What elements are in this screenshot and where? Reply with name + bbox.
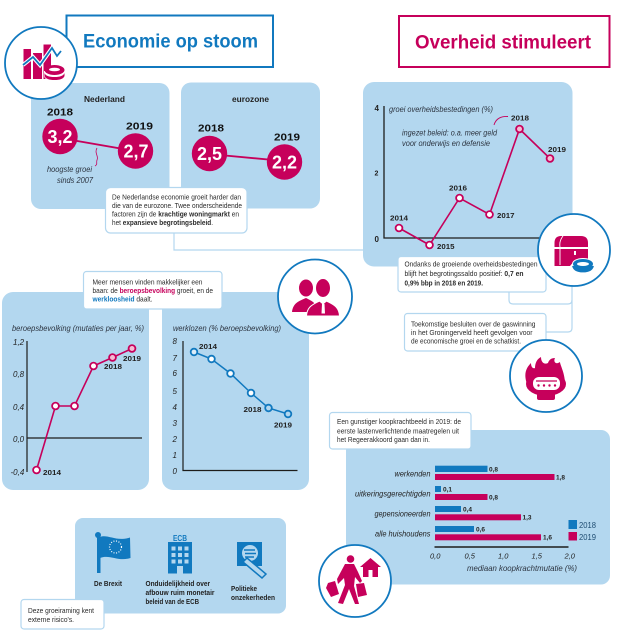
x axis labels: 0,0 [430, 552, 441, 560]
text box: begrotingssaldo [398, 256, 546, 292]
annotation: ingezet beleid: voor onderwijs en defensie [402, 139, 491, 148]
axis labels: 4 [172, 403, 178, 412]
value 2019 [267, 132, 302, 180]
category labels: alle huishoudens [375, 528, 431, 538]
year labels: 2019 [274, 420, 292, 430]
annotation: hoogste groei: sinds 2007 [57, 176, 94, 185]
text box: begrotingssaldo: Ondanks de groeiende overheidsbestedingen [404, 260, 538, 268]
value 2018 [42, 108, 78, 154]
chart title: beroepsbevolking (mutaties per jaar, %) [12, 323, 144, 333]
text box: Nederlandse economie: De Nederlandse economie groeit harder dan [112, 192, 241, 202]
title: Overheid stimuleert [399, 16, 610, 67]
panel: externe risico's [75, 518, 286, 614]
x axis labels [430, 552, 576, 560]
year labels: 2014 [43, 468, 62, 477]
axis labels: 2 [374, 170, 378, 178]
panel: groei overheidsbestedingen line chart [363, 82, 572, 266]
axis labels: 0 [374, 235, 380, 244]
text box: gaswinning: de economische groei en de schatkist. [411, 336, 521, 346]
text box: beroepsbevolking en werkloosheid: Meer mensen vinden makkelijker een [92, 278, 202, 286]
annotation: ingezet beleid: ingezet beleid: o.a. meer geld [402, 128, 497, 138]
year labels [43, 354, 141, 477]
panel: werklozen line chart [162, 292, 309, 490]
axes [183, 341, 298, 470]
text box: Nederlandse economie: die van de eurozone. Twee onderscheidende [112, 201, 242, 210]
value 2019: 2019 [274, 132, 301, 144]
text box: beroepsbevolking en werkloosheid [84, 272, 222, 309]
annotation: ingezet beleid [402, 116, 508, 148]
legend: 2019 [579, 532, 596, 542]
value 2019: 2019 [126, 122, 154, 132]
category labels: gepensioneerden [374, 508, 431, 518]
value 2018: 3,2 [48, 127, 72, 147]
text box: beroepsbevolking en werkloosheid: werkloosheid daalt. [92, 294, 152, 304]
axis labels: 0,8 [13, 370, 25, 379]
value labels: 0,1 [443, 486, 452, 494]
text box: Nederlandse economie [106, 188, 247, 233]
year labels [390, 114, 566, 251]
data line [194, 352, 288, 414]
text box: externe risico's: externe risico's. [28, 615, 74, 624]
risk: ECB: ECB [173, 534, 187, 543]
x axis labels: 2,0 [564, 552, 576, 560]
axis labels: 7 [172, 354, 178, 363]
text box: koopkrachtbeeld: het Regeerakkoord gaan dan in. [337, 435, 430, 444]
year labels: 2018 [104, 362, 122, 371]
risk: ECB: beleid van de ECB [146, 597, 199, 606]
title: Overheid stimuleert: Overheid stimuleert [415, 32, 591, 54]
risk: politieke onzekerheden: Politieke [231, 584, 257, 593]
text box: Nederlandse economie: het expansieve begrotingsbeleid. [112, 218, 213, 227]
icon: two people [278, 260, 352, 334]
text box: begrotingssaldo: blijft het begrotingssaldo positief: 0,7 en [404, 269, 524, 278]
axis labels: 3 [172, 419, 178, 428]
year labels: 2018 [511, 114, 529, 122]
axis labels: 0 [172, 467, 178, 476]
chart title: groei overheidsbestedingen (%) [389, 105, 493, 114]
x axis title: mediaan koopkrachtmutatie (%) [467, 563, 577, 573]
year labels: 2016 [449, 184, 467, 192]
year labels: 2015 [437, 242, 454, 251]
icon: gas flame [510, 340, 582, 412]
axis labels [172, 337, 178, 476]
data line [36, 348, 132, 470]
heading: Nederland: Nederland [84, 94, 125, 104]
value 2019 [118, 122, 154, 169]
category labels: werkenden [394, 468, 431, 478]
text box: koopkrachtbeeld [330, 412, 471, 449]
year labels: 2014 [199, 342, 218, 351]
text box: koopkrachtbeeld: Een gunstiger koopkrachtbeeld in 2019: de [337, 417, 461, 426]
year labels [199, 342, 292, 430]
title: Economie op stoom [66, 16, 273, 67]
axis labels: 8 [172, 337, 178, 346]
value 2019: 2,7 [124, 142, 148, 162]
icon: bars, trend line and coins [5, 27, 77, 99]
x axis labels: 1,0 [498, 552, 509, 560]
risk: De Brexit [94, 532, 130, 588]
value labels: 0,4 [463, 506, 472, 514]
axis labels: 0,0 [13, 435, 25, 444]
axis labels: 1,2 [13, 338, 25, 347]
axis labels [374, 104, 380, 244]
icon: shopper with house [319, 545, 391, 617]
axis labels: 6 [172, 369, 178, 378]
panel: beroepsbevolking line chart [2, 292, 149, 490]
connector lines [174, 233, 572, 332]
x axis labels: 1,5 [532, 552, 543, 560]
risk: De Brexit: De Brexit [94, 579, 122, 588]
risk: ECB [146, 534, 215, 606]
risk: ECB: Onduidelijkheid over [146, 579, 210, 588]
category labels: uitkeringsgerechtigden [355, 488, 431, 498]
panel: eurozone [181, 82, 320, 208]
chart title: werklozen (% beroepsbevolking) [173, 323, 281, 333]
text box: Nederlandse economie: factoren zijn de krachtige woningmarkt en [112, 210, 239, 218]
text box: beroepsbevolking en werkloosheid: baan: de beroepsbevolking groeit, en de [92, 286, 213, 295]
value labels: 1,3 [522, 514, 532, 522]
icon: treasure chest [538, 214, 610, 286]
data points [396, 126, 553, 248]
year labels: 2019 [548, 145, 566, 154]
year labels: 2017 [497, 211, 514, 220]
legend: 2018 [579, 520, 596, 530]
value 2018: 2018 [47, 108, 74, 118]
panel: Nederland [31, 83, 170, 209]
data line [399, 129, 550, 245]
category labels [355, 468, 431, 538]
axis labels: 1 [172, 451, 177, 460]
year labels: 2019 [123, 354, 141, 363]
text box: begrotingssaldo: 0,9% bbp in 2018 en 2019. [404, 278, 483, 288]
value 2018 [192, 124, 227, 171]
value labels: 0,8 [489, 494, 498, 502]
text box: koopkrachtbeeld: eerste lastenverlichtende maatregelen uit [337, 426, 459, 436]
value 2019: 2,2 [272, 152, 297, 172]
value labels: 0,6 [476, 526, 485, 534]
data points [33, 345, 135, 473]
value 2018: 2,5 [197, 144, 222, 164]
panel: koopkracht bar chart [346, 430, 610, 584]
text box: gaswinning: Toekomstige besluiten over de gaswinning [411, 320, 536, 328]
year labels: 2014 [390, 214, 409, 222]
axis labels: 5 [172, 387, 178, 396]
bars 2019 [435, 474, 554, 540]
risk: politieke onzekerheden [231, 542, 275, 602]
risk: ECB: afbouw ruim monetair [146, 588, 215, 597]
data points [191, 349, 291, 417]
value labels [443, 466, 565, 542]
axis labels: 4 [374, 104, 380, 113]
axes [27, 341, 142, 472]
text box: externe risico's [21, 600, 104, 629]
value 2018: 2018 [198, 124, 225, 134]
annotation: hoogste groei [47, 148, 97, 185]
axis labels [10, 338, 25, 477]
x axis [434, 546, 568, 548]
x axis labels: 0,5 [464, 552, 476, 560]
axis labels: 2 [172, 435, 178, 444]
legend [568, 520, 596, 542]
text box: gaswinning: in het Groningerveld heeft gevolgen voor [411, 328, 533, 337]
axes [384, 106, 546, 238]
value labels: 1,8 [556, 474, 565, 482]
bars 2018 [435, 466, 488, 532]
risk: politieke onzekerheden: onzekerheden [231, 593, 275, 602]
text box: gaswinning [404, 314, 546, 351]
title: Economie op stoom: Economie op stoom [83, 30, 258, 52]
heading: eurozone: eurozone [232, 94, 269, 104]
connector 2018 to 2019 [209, 154, 284, 161]
value labels: 0,8 [489, 466, 498, 474]
axis labels: 0,4 [13, 403, 25, 412]
connector 2018 to 2019 [60, 138, 135, 151]
value labels: 1,6 [543, 534, 552, 542]
axis labels: -0,4 [10, 468, 25, 477]
year labels: 2018 [244, 405, 262, 414]
text box: externe risico's: Deze groeiraming kent [28, 606, 94, 615]
annotation: hoogste groei: hoogste groei [47, 165, 92, 174]
